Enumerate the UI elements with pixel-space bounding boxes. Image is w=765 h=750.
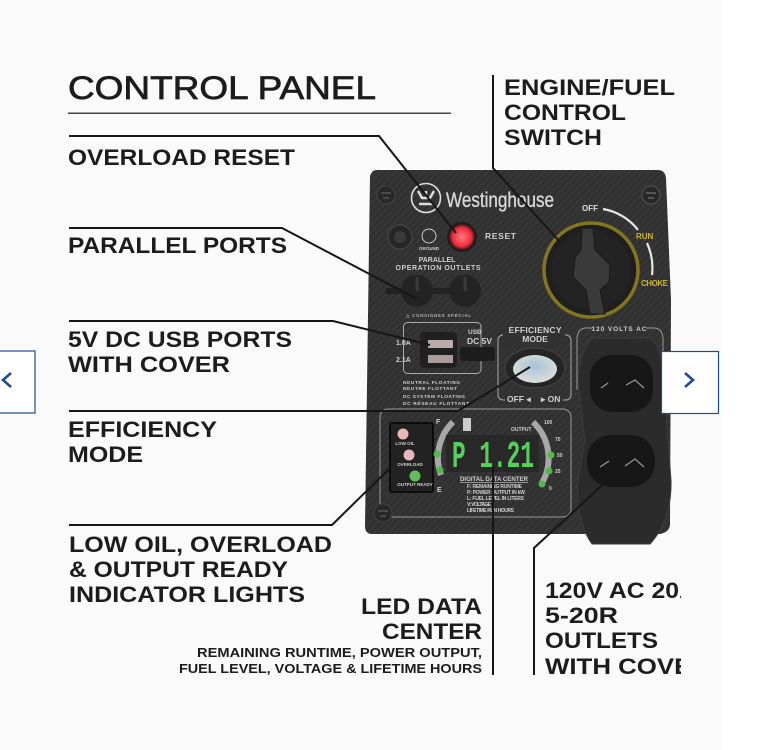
label: engine fuel switch: ENGINE/FUEL xyxy=(504,75,675,100)
outlet frame label: 120 VOLTS AC xyxy=(592,326,647,333)
label: overload reset: OVERLOAD RESET xyxy=(68,145,295,170)
outlet frame label xyxy=(577,326,663,400)
indicator lights: OVERLOAD xyxy=(397,462,423,467)
leader lines xyxy=(69,75,610,675)
floating text xyxy=(403,380,469,407)
icon: Westinghouse logo xyxy=(412,184,440,212)
fuel gauge arc: F xyxy=(436,419,441,426)
efficiency mode switch: OFF ◂ xyxy=(507,394,531,404)
engine switch dial xyxy=(544,204,669,317)
icon: rocker switch xyxy=(505,348,565,388)
efficiency mode switch: MODE xyxy=(522,334,548,344)
outlets with cover xyxy=(578,338,671,544)
dial labels: RUN xyxy=(636,232,654,241)
icon: bottom left screw xyxy=(374,504,392,522)
icon: parallel ports xyxy=(386,275,481,307)
warning label: △ CONSIGNES SPÉCIAL xyxy=(405,311,471,318)
output gauge arc: 50 xyxy=(557,453,563,459)
usb labels: DC 5V xyxy=(467,336,492,346)
floating text: NEUTRAL FLOATING xyxy=(403,380,460,386)
button: next arrow xyxy=(662,352,718,414)
label: outlets xyxy=(545,582,681,674)
label: led data center detail xyxy=(179,646,482,676)
parallel label: PARALLEL xyxy=(419,257,456,264)
LED display xyxy=(446,435,539,479)
fuel gauge arc: E xyxy=(437,487,442,494)
label: efficiency mode: MODE xyxy=(68,442,143,467)
label: engine fuel switch: SWITCH xyxy=(504,125,602,150)
digital data center legend: DIGITAL DATA CENTER xyxy=(460,476,529,483)
output gauge arc xyxy=(511,420,563,492)
icon: ground terminal xyxy=(388,225,440,251)
label: indicator lights: & OUTPUT READY xyxy=(69,557,288,582)
icon: top left screw xyxy=(377,186,395,204)
label: usb ports: 5V DC USB PORTS xyxy=(68,327,292,352)
label: outlets: 5-20R xyxy=(545,603,618,628)
digital data center legend: L: FUEL LEVEL IN LITERS xyxy=(467,496,525,502)
digital data center legend: P: POWER OUTPUT IN kW xyxy=(467,490,525,496)
icon: lower outlet xyxy=(587,435,655,487)
icon: dial handle xyxy=(573,228,610,314)
label: led data center xyxy=(361,594,482,644)
label: engine fuel switch xyxy=(504,75,675,150)
title rule xyxy=(68,112,451,114)
output gauge arc: 75 xyxy=(555,437,561,443)
dial labels xyxy=(582,204,669,288)
label: led data center detail: REMAINING RUNTIME, POWER OUTPUT, xyxy=(197,646,482,660)
floating text: NEUTRE FLOTTANT xyxy=(403,386,457,392)
label: led data center: CENTER xyxy=(382,619,482,644)
parallel label: OPERATION OUTLETS xyxy=(396,265,481,272)
label: efficiency mode xyxy=(68,417,217,467)
button: previous arrow xyxy=(0,351,35,413)
digital data center legend xyxy=(460,476,529,514)
label: outlets: 120V AC 20A xyxy=(545,578,697,603)
output gauge arc: 25 xyxy=(555,469,561,475)
efficiency mode switch xyxy=(498,325,571,404)
indicator lights: LOW OIL xyxy=(395,441,415,446)
label: indicator lights: INDICATOR LIGHTS xyxy=(69,582,305,607)
data center frame xyxy=(380,409,571,517)
icon: top right screw xyxy=(642,186,660,204)
output gauge arc: 0 xyxy=(549,486,552,492)
fuel gauge arc xyxy=(434,418,471,494)
dial labels: OFF xyxy=(582,204,598,213)
efficiency mode switch: EFFICIENCY xyxy=(508,325,562,335)
floating text: DC SYSTEM FLOATING xyxy=(403,394,465,400)
usb labels: 1.0A xyxy=(396,340,411,347)
indicator lights xyxy=(390,423,433,492)
LED display: P 1.21 xyxy=(452,436,534,479)
dial labels: CHOKE xyxy=(641,279,669,288)
efficiency mode switch: ▸ ON xyxy=(540,394,560,404)
panel: generator control panel xyxy=(365,170,671,544)
icon: upper outlet xyxy=(590,355,653,412)
reset label: RESET xyxy=(485,231,517,241)
usb port frame xyxy=(396,322,495,374)
indicator lights: OUTPUT READY xyxy=(397,482,433,487)
icon: ground terminal: GROUND xyxy=(419,246,440,251)
usb labels xyxy=(396,329,492,364)
icon: usb ports xyxy=(420,332,495,368)
label: usb ports: WITH COVER xyxy=(68,352,230,377)
title: CONTROL PANEL xyxy=(68,70,376,106)
label: indicator lights xyxy=(69,532,332,607)
label: parallel ports: PARALLEL PORTS xyxy=(68,233,287,258)
digital data center legend: LIFETIME RUN HOURS xyxy=(467,508,515,514)
usb labels: 2.1A xyxy=(396,357,411,364)
brand name: Westinghouse xyxy=(446,189,554,212)
label: efficiency mode: EFFICIENCY xyxy=(68,417,217,442)
label: usb ports xyxy=(68,327,292,377)
output gauge arc: 100 xyxy=(544,420,553,426)
floating text: DC RÉSEAU FLOTTANT xyxy=(403,399,469,407)
label: indicator lights: LOW OIL, OVERLOAD xyxy=(69,532,332,557)
digital data center legend: F: REMAINING RUNTIME xyxy=(467,484,523,490)
digital data center legend: V: VOLTAGE xyxy=(467,502,492,508)
icon: red reset button xyxy=(447,222,477,252)
label: led data center: LED DATA xyxy=(361,594,482,619)
parallel label xyxy=(396,257,481,272)
output gauge arc: OUTPUT xyxy=(511,427,532,433)
label: led data center detail: FUEL LEVEL, VOLTAGE & LIFETIME HOURS xyxy=(179,662,482,676)
label: outlets: WITH COVER xyxy=(545,654,710,679)
label: engine fuel switch: CONTROL xyxy=(504,100,626,125)
label: outlets: OUTLETS xyxy=(545,628,658,653)
usb labels: USB xyxy=(468,329,482,336)
